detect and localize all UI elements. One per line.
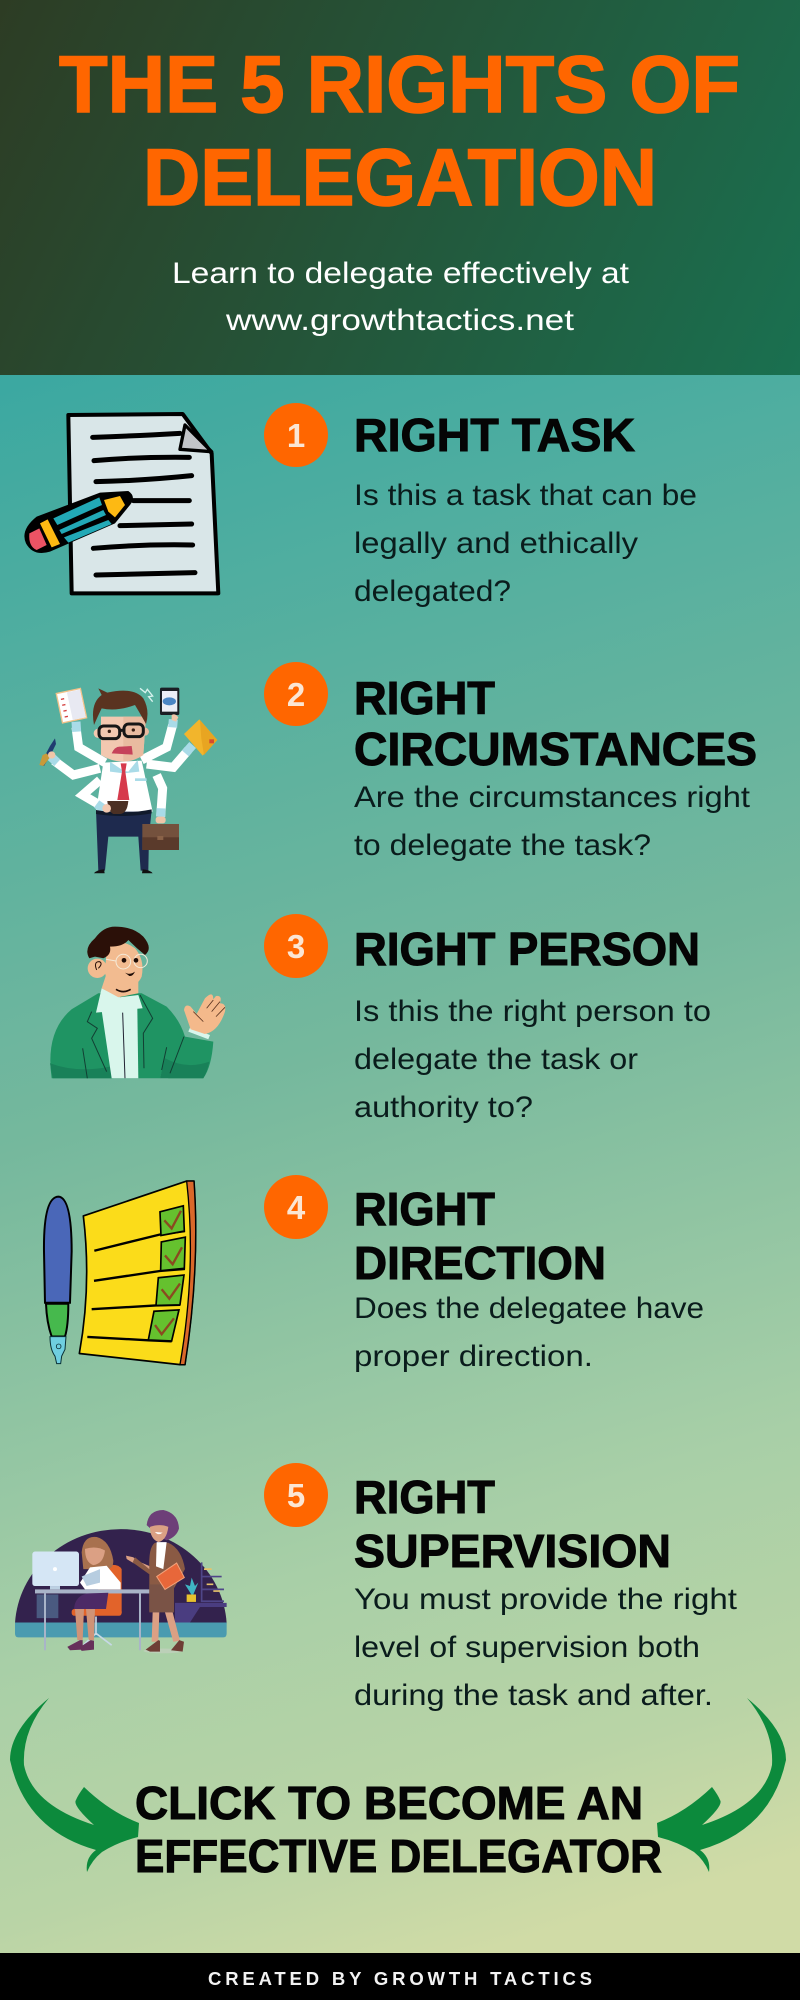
item 3 text: authority to? (354, 1091, 533, 1124)
item 1 text: Is this a task that can be (354, 479, 697, 512)
item 4 heading: RIGHT (354, 1183, 495, 1235)
item 1 text (354, 479, 697, 608)
item 4 number badge: 4 (287, 1189, 306, 1226)
item 5 heading (354, 1471, 671, 1577)
item 2 text: Are the circumstances right (354, 781, 751, 814)
item 5 text: You must provide the right (354, 1583, 738, 1616)
item 1 number badge (264, 403, 328, 467)
item 5 heading: SUPERVISION (354, 1525, 671, 1577)
panel: main background (0, 375, 800, 1953)
item 1 text: delegated? (354, 575, 511, 608)
item 3 text (354, 995, 711, 1124)
item 4 text: proper direction. (354, 1340, 593, 1373)
item 5 text: level of supervision both (354, 1631, 700, 1664)
item 3 number badge: 3 (287, 928, 305, 965)
item 4 heading: DIRECTION (354, 1237, 606, 1289)
item 4 heading (354, 1183, 606, 1289)
item 2 text: to delegate the task? (354, 829, 651, 862)
item 4 text (354, 1292, 704, 1373)
subtitle: Learn to delegate effectively at (172, 257, 630, 290)
item 1 heading: RIGHT TASK (354, 409, 635, 461)
item 2 number badge: 2 (287, 676, 305, 713)
subtitle: www.growthtactics.net (225, 304, 575, 337)
title (59, 40, 740, 223)
panel: footer bar (0, 1953, 800, 2000)
item 3 heading: RIGHT PERSON (354, 923, 700, 975)
item 1 number badge: 1 (287, 417, 305, 454)
item 5 text (354, 1583, 738, 1712)
icon: man with glasses waving (50, 927, 225, 1078)
item 1 text: legally and ethically (354, 527, 638, 560)
item 2 heading: RIGHT (354, 672, 495, 724)
call to action (135, 1777, 662, 1882)
arrow: right curved arrow (657, 1698, 786, 1872)
icon: pen and checklist (44, 1181, 196, 1365)
item 2 heading (354, 672, 757, 775)
item 2 number badge (264, 662, 328, 726)
arrow: left curved arrow (10, 1698, 139, 1872)
item 5 number badge: 5 (287, 1477, 305, 1514)
title: DELEGATION (143, 133, 657, 223)
item 5 heading: RIGHT (354, 1471, 495, 1523)
footer text: CREATED BY GROWTH TACTICS (208, 1968, 592, 1989)
call to action: CLICK TO BECOME AN (135, 1777, 643, 1829)
item 5 number badge (264, 1463, 328, 1527)
title: THE 5 RIGHTS OF (59, 40, 740, 130)
item 2 heading: CIRCUMSTANCES (354, 723, 757, 775)
item 4 number badge (264, 1175, 328, 1239)
item 3 text: delegate the task or (354, 1043, 638, 1076)
call to action: EFFECTIVE DELEGATOR (135, 1830, 662, 1882)
item 3 text: Is this the right person to (354, 995, 711, 1028)
icon: multitasking man (39, 688, 217, 873)
icon: two women at office desk (15, 1510, 227, 1653)
item 2 text (354, 781, 751, 862)
subtitle (172, 257, 630, 337)
item 3 number badge (264, 914, 328, 978)
item 4 text: Does the delegatee have (354, 1292, 704, 1325)
item 5 text: during the task and after. (354, 1679, 713, 1712)
icon: document and pencil (24, 414, 218, 593)
panel: header background (0, 0, 800, 375)
